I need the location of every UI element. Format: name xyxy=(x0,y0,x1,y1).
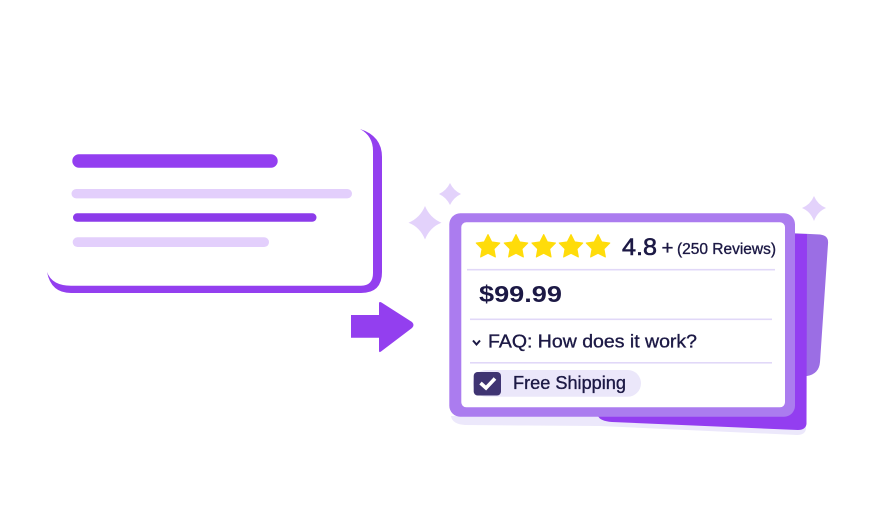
icon: large sparkle xyxy=(408,206,442,240)
faq text: FAQ: How does it work? xyxy=(488,330,697,352)
badge text: Free Shipping xyxy=(513,373,626,393)
icon: small sparkle xyxy=(439,183,461,205)
dark text bar xyxy=(73,213,316,222)
icon: chevron xyxy=(473,340,480,344)
arrow xyxy=(351,302,414,352)
back page dark xyxy=(598,234,807,430)
lower shadow xyxy=(451,416,806,435)
card body xyxy=(461,222,785,407)
light text bar 2 xyxy=(73,237,269,247)
badge pill xyxy=(473,370,641,397)
panel: plain card before xyxy=(47,129,382,293)
divider xyxy=(467,269,775,270)
headline bar xyxy=(72,154,278,168)
free shipping badge xyxy=(473,370,641,397)
rating row xyxy=(476,234,776,261)
divider xyxy=(470,318,772,320)
back page light xyxy=(790,233,828,376)
rating value: 4.8 xyxy=(622,234,657,261)
panel: enriched product card xyxy=(449,213,828,435)
icon: checkbox xyxy=(474,372,501,396)
icon: right sparkle xyxy=(802,196,826,221)
plus sign: + xyxy=(662,238,674,259)
divider xyxy=(470,362,772,364)
review count: (250 Reviews) xyxy=(677,241,776,258)
price: $99.99 xyxy=(479,281,562,307)
icon: five stars xyxy=(476,234,610,257)
icon: check mark xyxy=(480,378,495,388)
card border crescent xyxy=(47,129,382,293)
faq row xyxy=(473,330,697,352)
card frame xyxy=(449,213,795,417)
light text bar 1 xyxy=(72,189,352,198)
